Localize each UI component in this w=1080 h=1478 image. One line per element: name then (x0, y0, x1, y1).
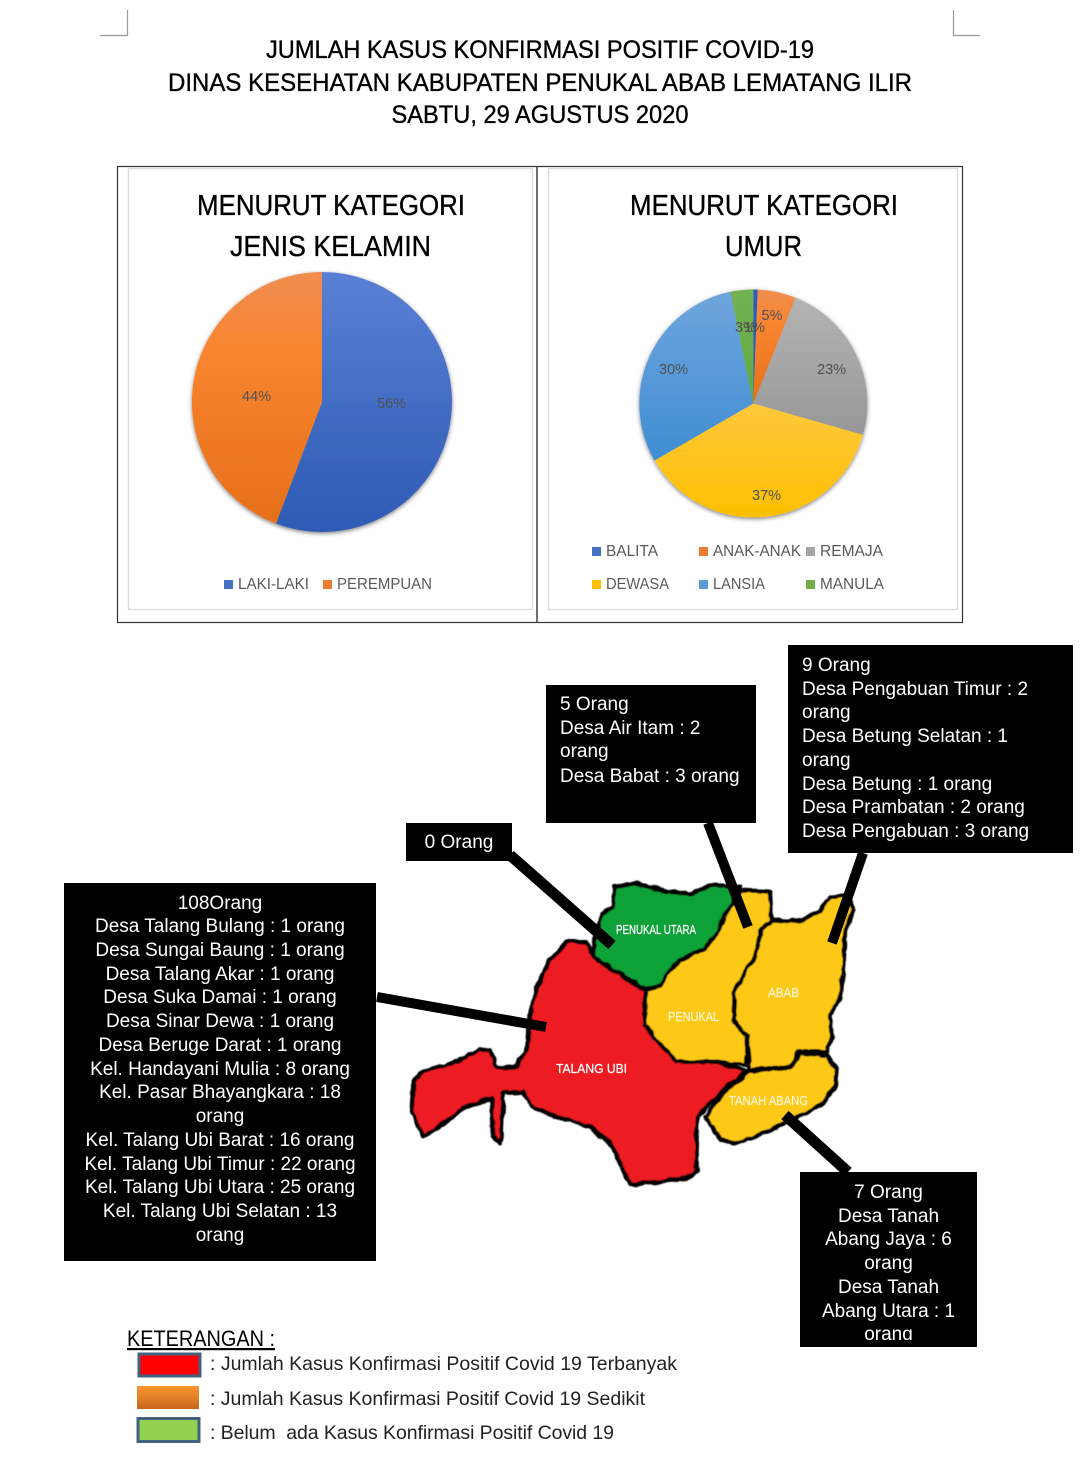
callout: Talang Ubi 108 orang: Desa Sungai Baung : 1 orang (95, 940, 345, 961)
callout: Tanah Abang 7 orang: Abang Jaya : 6 (825, 1229, 952, 1250)
heading: age chart: UMUR (725, 231, 802, 263)
legend: map colour key: : Jumlah Kasus Konfirmasi Positif Covid 19 Terbanyak (210, 1353, 677, 1375)
title: SABTU, 29 AGUSTUS 2020 (392, 101, 688, 129)
map labels: TANAH ABANG (729, 1093, 808, 1108)
callout: Talang Ubi 108 orang: Kel. Handayani Mulia : 8 orang (90, 1059, 350, 1080)
district: Tanah Abang (705, 1053, 837, 1143)
callout: Talang Ubi 108 orang: orang (196, 1106, 244, 1127)
legend: age: MANULA (820, 576, 885, 593)
callout: Tanah Abang 7 orang: orang (864, 1324, 913, 1345)
map labels: ABAB (768, 985, 799, 1000)
callout: Tanah Abang 7 orang (800, 1172, 977, 1347)
title: JUMLAH KASUS KONFIRMASI POSITIF COVID-19 (266, 36, 814, 64)
callout: Pengabuan 9 orang (788, 645, 1073, 853)
heading: gender chart: MENURUT KATEGORI (197, 190, 465, 222)
callout: Pengabuan 9 orang: Desa Prambatan : 2 orang (802, 797, 1025, 818)
legend: map colour key: : Belum ada Kasus Konfirmasi Positif Covid 19 (210, 1422, 614, 1444)
legend: gender: LAKI-LAKI (238, 576, 309, 593)
map labels: PENUKAL UTARA (616, 922, 696, 937)
title: DINAS KESEHATAN KABUPATEN PENUKAL ABAB LEMATANG ILIR (168, 69, 912, 97)
callout: Talang Ubi 108 orang: Kel. Talang Ubi Barat : 16 orang (86, 1130, 354, 1151)
map labels: PENUKAL (668, 1009, 719, 1024)
callout: Air Itam 5 orang: 5 Orang (560, 694, 629, 715)
legend: age: DEWASA (606, 576, 670, 593)
district: Talang Ubi (412, 942, 747, 1185)
callout: Pengabuan 9 orang: 9 Orang (802, 655, 871, 676)
pie labels: age: 30% (659, 362, 688, 378)
callout: Talang Ubi 108 orang: Desa Talang Bulang : 1 orang (95, 916, 345, 937)
callout: Talang Ubi 108 orang: Desa Sinar Dewa : 1 orang (106, 1011, 334, 1032)
callout: Talang Ubi 108 orang: Kel. Pasar Bhayangkara : 18 (99, 1082, 341, 1103)
legend: age: LANSIA (713, 576, 766, 593)
pie labels: age: 3% (735, 320, 756, 336)
district: Penukal Utara (593, 884, 740, 988)
callout: Talang Ubi 108 orang: orang (196, 1225, 244, 1246)
callout: Talang Ubi 108 orang: Desa Talang Akar : 1 orang (106, 964, 334, 985)
pie labels: age: 23% (817, 362, 846, 378)
legend heading: keterangan: KETERANGAN : (127, 1326, 275, 1351)
map labels: TALANG UBI (556, 1061, 627, 1076)
callout: Air Itam 5 orang: orang (560, 741, 609, 762)
pie chart: gender (192, 272, 452, 532)
pie chart: age (639, 289, 867, 517)
callout: Talang Ubi 108 orang: 108Orang (178, 893, 262, 914)
pie labels: age: 37% (752, 488, 781, 504)
district: Penukal (645, 890, 772, 1065)
callout: Pengabuan 9 orang: Desa Pengabuan Timur : 2 (802, 679, 1028, 700)
legend: map colour key: : Jumlah Kasus Konfirmasi Positif Covid 19 Sedikit (210, 1388, 646, 1410)
legend: age (592, 543, 885, 593)
callout: Pengabuan 9 orang: Desa Betung Selatan : 1 (802, 726, 1008, 747)
pie labels: gender (242, 389, 406, 412)
connector lines (377, 823, 863, 1172)
callout: Talang Ubi 108 orang (64, 883, 376, 1261)
heading: gender chart (197, 190, 465, 263)
pie labels: age: 1% (744, 320, 765, 336)
callout: Pengabuan 9 orang: orang (802, 750, 851, 771)
callout: Pengabuan 9 orang: Desa Pengabuan : 3 orang (802, 821, 1029, 842)
callout: Talang Ubi 108 orang: Desa Suka Damai : 1 orang (103, 987, 337, 1008)
page corner marks (100, 10, 980, 36)
panel: gender pie chart (128, 168, 532, 610)
panel: chart table frame (118, 166, 962, 623)
heading: gender chart: JENIS KELAMIN (230, 231, 431, 263)
heading: age chart (630, 190, 898, 263)
callout: Tanah Abang 7 orang: Desa Tanah (838, 1277, 939, 1298)
callout: Tanah Abang 7 orang: orang (864, 1253, 913, 1274)
heading: age chart: MENURUT KATEGORI (630, 190, 898, 222)
callout: Pengabuan 9 orang: Desa Betung : 1 orang (802, 774, 992, 795)
callout: Air Itam 5 orang: Desa Babat : 3 orang (560, 766, 740, 787)
callout: Tanah Abang 7 orang: 7 Orang (854, 1182, 923, 1203)
callout: Air Itam 5 orang (546, 685, 756, 823)
district: Abab (733, 895, 853, 1070)
callout: Air Itam 5 orang: Desa Air Itam : 2 (560, 718, 700, 739)
legend: map colour key (137, 1353, 677, 1444)
pie labels: age (659, 308, 846, 504)
pie labels: age: 5% (762, 308, 783, 324)
callout: Pengabuan 9 orang: orang (802, 702, 851, 723)
title (168, 36, 912, 129)
legend: gender: PEREMPUAN (337, 576, 432, 593)
callout: 0 orang (406, 823, 512, 861)
pie labels: gender: 44% (242, 389, 271, 405)
map labels (556, 922, 808, 1108)
callout: Talang Ubi 108 orang: Kel. Talang Ubi Utara : 25 orang (85, 1177, 355, 1198)
legend: age: REMAJA (820, 543, 884, 560)
panel: age pie chart (548, 168, 958, 610)
callout: Talang Ubi 108 orang: Desa Beruge Darat : 1 orang (99, 1035, 341, 1056)
callout: Talang Ubi 108 orang: Kel. Talang Ubi Selatan : 13 (103, 1201, 337, 1222)
callout: Tanah Abang 7 orang: Desa Tanah (838, 1206, 939, 1227)
map of districts (412, 884, 853, 1185)
legend: gender (224, 576, 432, 593)
pie labels: gender: 56% (377, 396, 406, 412)
callout: 0 orang: 0 Orang (425, 832, 493, 853)
legend: age: BALITA (606, 543, 659, 560)
callout: Tanah Abang 7 orang: Abang Utara : 1 (822, 1301, 955, 1322)
legend: age: ANAK-ANAK (713, 543, 802, 560)
callout: Talang Ubi 108 orang: Kel. Talang Ubi Timur : 22 orang (84, 1154, 356, 1175)
